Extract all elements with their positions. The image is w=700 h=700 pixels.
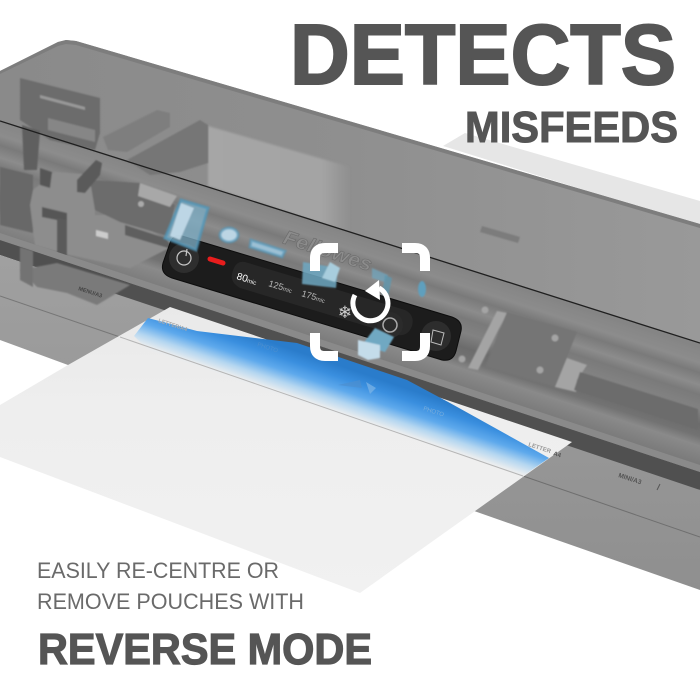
- background paper behind laminator: [443, 133, 700, 226]
- blue chip 2: [220, 228, 238, 242]
- blue chip 5: [372, 268, 388, 282]
- description text: EASILY RE-CENTRE OR: [37, 558, 279, 583]
- control panel: [162, 236, 461, 360]
- red status light: [210, 259, 223, 263]
- feed tray: [0, 255, 700, 590]
- internal frame brackets: [0, 110, 208, 268]
- front face: [0, 121, 700, 476]
- black seam line: [0, 121, 700, 343]
- icon: snowflake: ❄: [338, 303, 352, 323]
- title: DETECTS: DETECTS: [290, 8, 676, 103]
- icon: reverse button: [377, 312, 403, 338]
- blue document in pouch: [134, 318, 549, 476]
- pouch paper: PHOTO: [422, 406, 445, 419]
- mic settings: 80mic: [235, 271, 258, 288]
- blue chip 1: [165, 200, 208, 250]
- mic settings: [235, 271, 327, 305]
- tray details: MINI/A3: [617, 472, 643, 486]
- pouch paper: PHOTO: [256, 342, 279, 355]
- tray details: MENU/A3: [77, 286, 103, 300]
- subtitle: MISFEEDS: MISFEEDS: [465, 103, 678, 152]
- paper sheet: [0, 307, 572, 593]
- internal right mounting plate: [458, 306, 698, 430]
- mic settings: 125mic: [267, 278, 294, 295]
- icon: power button: [169, 243, 199, 273]
- blue chip 3: [250, 240, 285, 257]
- dark lower edge: [0, 240, 700, 490]
- blue chip 4: [302, 262, 338, 288]
- heading: REVERSE MODE: REVERSE MODE: [38, 625, 372, 674]
- internal circuit board: [20, 78, 100, 170]
- translucent blue internal components: [165, 200, 426, 360]
- laminator body: [0, 40, 700, 490]
- top face: [0, 40, 700, 345]
- scan frame brackets: [315, 248, 425, 356]
- description text: [37, 558, 304, 614]
- pouch paper: A4: [552, 451, 562, 459]
- pouch paper: LETTER: [527, 442, 552, 455]
- description text: REMOVE POUCHES WITH: [37, 589, 304, 614]
- Fellowes logo: Fellowes: [280, 227, 375, 276]
- paper fold line: [120, 337, 523, 476]
- tray details: [0, 247, 700, 537]
- faint pouch labels: LETTER/A4: [157, 318, 189, 333]
- icon: pouch release button: [421, 321, 451, 351]
- icon: reverse arrow: [353, 280, 388, 321]
- panel body: [162, 236, 461, 360]
- mic settings: 175mic: [300, 288, 327, 305]
- small slot on top: [480, 226, 520, 243]
- lighter internal wedge: [208, 126, 350, 232]
- blue chip 6: [362, 328, 394, 352]
- pouch paper: [0, 307, 572, 593]
